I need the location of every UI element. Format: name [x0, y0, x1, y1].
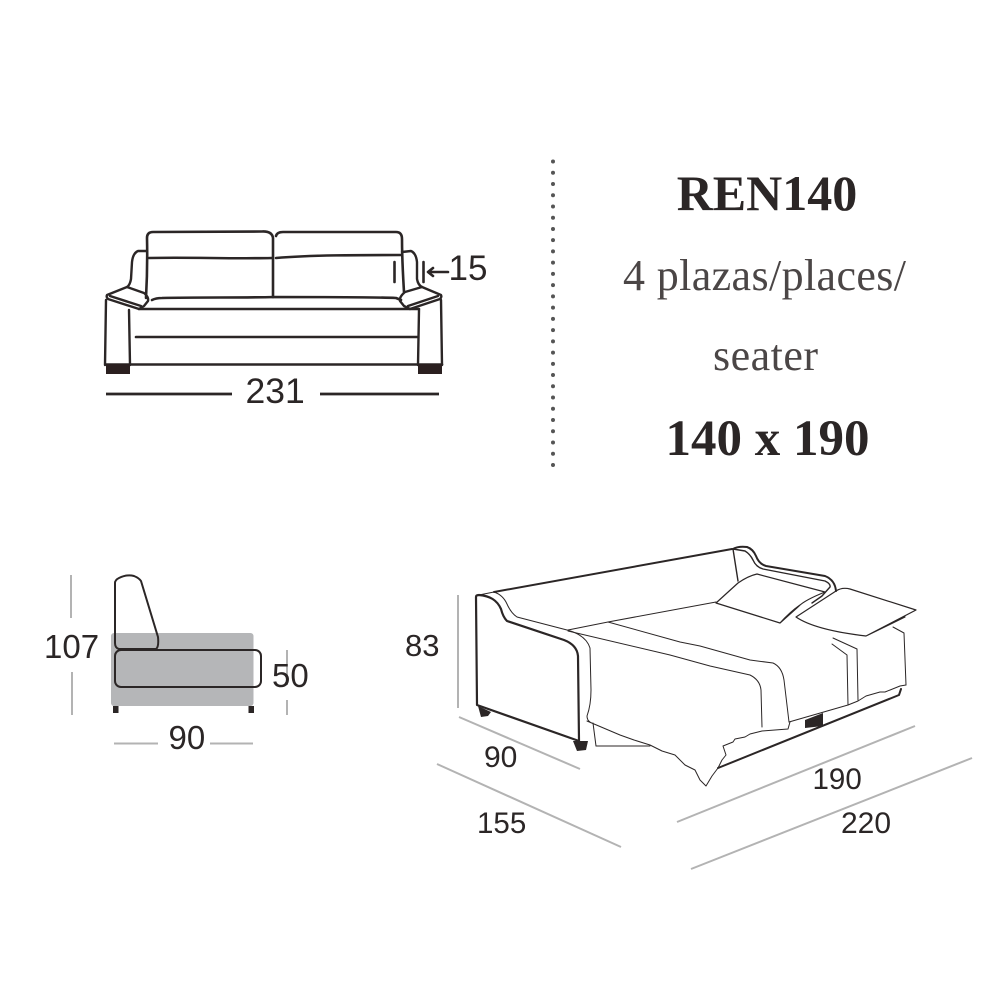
panel: open sofa bed perspective [405, 547, 972, 869]
dotted divider [551, 162, 555, 465]
label: 15: 15 [448, 249, 487, 288]
seats text line 1: 4 plazas/places/ [623, 251, 907, 300]
depth dimension lines [114, 742, 253, 744]
label: 83: 83 [405, 628, 439, 663]
width dimension line [106, 393, 439, 395]
dimension line: 220 [691, 758, 972, 869]
legs [113, 706, 254, 713]
feet [478, 706, 588, 751]
seats text line 2: seater [713, 331, 818, 380]
pillow left [716, 574, 825, 623]
base line [718, 689, 901, 768]
arm width marker [394, 262, 448, 282]
backrest [115, 575, 158, 649]
label: 107: 107 [44, 628, 99, 665]
pillow right [796, 588, 916, 636]
right foot [418, 364, 442, 374]
left arm top [479, 592, 591, 722]
panel: side section view [44, 575, 309, 756]
label: 155: 155 [477, 807, 526, 840]
seat height dimension lines [286, 650, 288, 715]
right arm [733, 547, 836, 603]
height dimension lines [71, 575, 72, 715]
left arm side [476, 595, 579, 741]
right arm [400, 251, 442, 365]
model name: REN140 [677, 165, 857, 221]
hanging blanket [587, 721, 790, 786]
dimension line: 83 [457, 595, 459, 708]
back cushions [146, 231, 404, 300]
title block [623, 165, 907, 467]
label: 220: 220 [841, 807, 891, 840]
storage handle [805, 713, 823, 728]
seat front [106, 309, 442, 364]
back top edge [494, 549, 732, 592]
arrow [428, 268, 448, 276]
grey body [111, 633, 254, 706]
panel: front view of sofa [105, 231, 487, 411]
dimension line: 155 [437, 764, 621, 847]
left foot [106, 364, 130, 374]
label: 231: 231 [246, 371, 305, 411]
label: 90: 90 [168, 719, 205, 756]
bed size: 140 x 190 [666, 411, 870, 467]
label: 50: 50 [272, 657, 309, 694]
dimension line: 190 [677, 726, 915, 822]
seat cushion [115, 650, 261, 687]
left arm [105, 251, 148, 365]
dimension line: 90 [459, 717, 580, 769]
mattress lines [568, 602, 906, 727]
label: 190: 190 [812, 763, 862, 796]
blanket underside [593, 723, 650, 746]
label: 90: 90 [484, 741, 517, 774]
